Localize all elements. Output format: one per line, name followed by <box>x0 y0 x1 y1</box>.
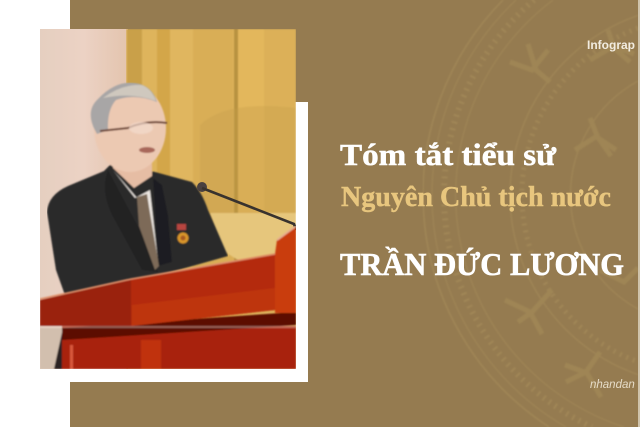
microphone <box>197 182 296 230</box>
glasses <box>100 122 167 131</box>
hair <box>91 83 157 134</box>
source label: nhandan <box>590 379 635 391</box>
emblem watermark <box>423 0 638 427</box>
shirt <box>113 170 158 264</box>
name: TRẦN ĐỨC LƯƠNG <box>340 246 624 282</box>
right edge strip <box>638 0 640 427</box>
speaker <box>47 83 228 298</box>
suit <box>47 163 228 298</box>
curtain <box>126 29 296 369</box>
tie <box>137 194 159 270</box>
title line 2: Nguyên Chủ tịch nước <box>341 182 611 213</box>
infographic label: Infograp <box>587 38 635 52</box>
neck <box>112 162 154 189</box>
medal <box>178 232 188 244</box>
title line 1: Tóm tắt tiểu sử <box>340 137 556 172</box>
head <box>94 96 167 172</box>
white photo frame <box>40 102 308 382</box>
wall <box>40 29 128 369</box>
portrait photo <box>40 29 296 369</box>
mouth <box>139 147 155 153</box>
podium <box>40 226 296 369</box>
